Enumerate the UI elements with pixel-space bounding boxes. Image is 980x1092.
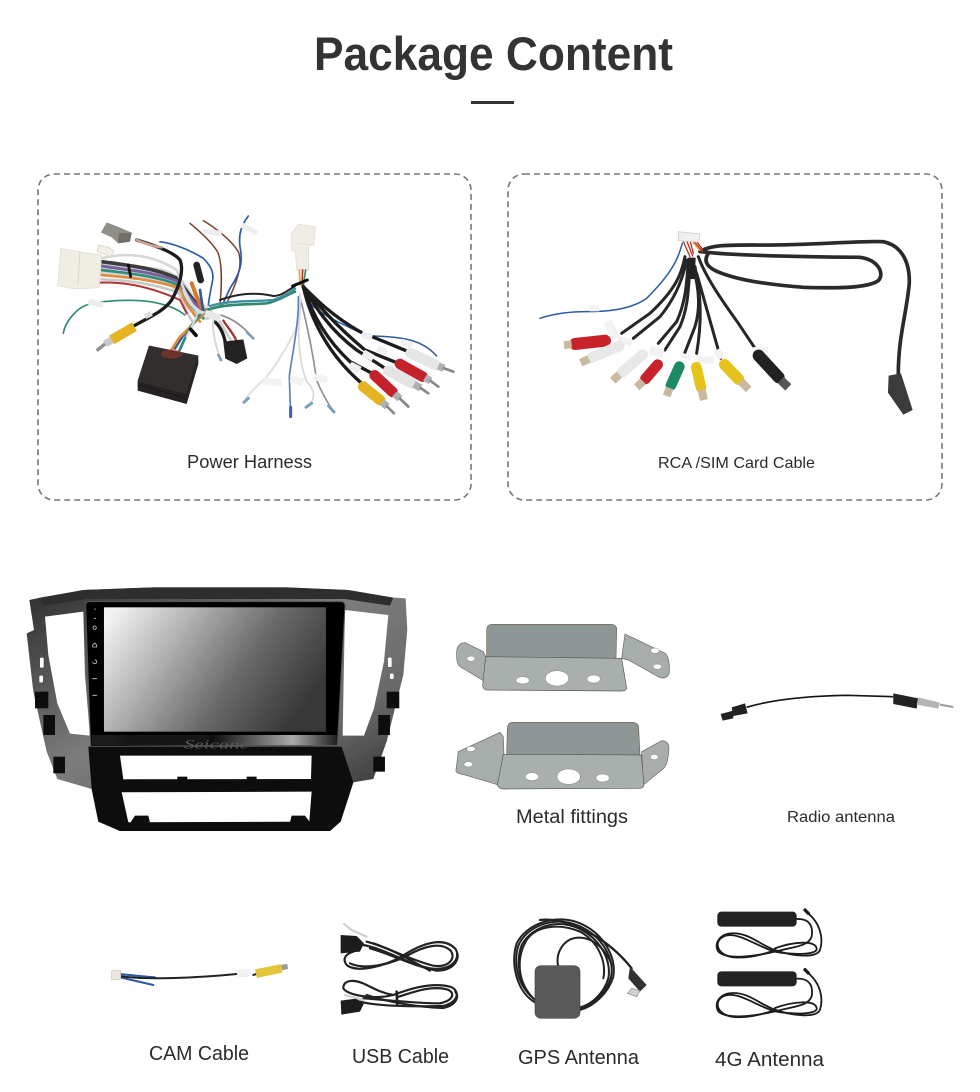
bezel icons (92, 608, 97, 695)
CAM cable (112, 966, 288, 985)
yellow RCA plug (97, 327, 134, 351)
4G antenna pair (717, 910, 821, 1017)
antenna two (717, 970, 821, 1017)
GPS antenna (514, 919, 647, 1018)
panel: power harness (38, 174, 471, 500)
label: USB cable: USB Cable (352, 1046, 449, 1068)
grey connector (101, 222, 132, 243)
frame clips (35, 692, 399, 823)
antenna one (717, 910, 821, 958)
label: power harness: Power Harness (187, 452, 312, 472)
control box (138, 346, 198, 404)
top bracket (457, 624, 669, 691)
frame windows (39, 610, 394, 822)
USB cable (341, 924, 458, 1015)
fan of wires (88, 225, 437, 417)
white right connector (292, 224, 315, 270)
power harness photo (58, 216, 453, 417)
RCA plugs (564, 341, 788, 400)
brand text: Seicane (184, 738, 250, 752)
RCA cable photo (540, 232, 913, 415)
label: metal fittings: Metal fittings (516, 807, 628, 828)
bezel (86, 602, 345, 746)
RCA plugs (244, 353, 453, 417)
radio antenna (721, 693, 953, 721)
label: CAM cable: CAM Cable (149, 1043, 249, 1065)
metal fittings (456, 624, 669, 789)
label: GPS antenna: GPS Antenna (518, 1046, 640, 1069)
head unit with dash frame (27, 587, 407, 831)
white connector (58, 245, 114, 289)
screen (104, 607, 326, 732)
title: Package Content (314, 27, 673, 80)
label: radio antenna: Radio antenna (787, 809, 895, 826)
panel: RCA / SIM card cable (508, 174, 942, 500)
label: RCA / SIM card cable: RCA /SIM Card Cable (658, 455, 815, 472)
SIM connector (678, 232, 913, 415)
black plug (223, 339, 247, 364)
title underline (471, 101, 514, 104)
bottom bracket (456, 722, 669, 789)
dash frame (27, 587, 407, 831)
labels on wires (589, 308, 768, 360)
label: 4G antenna: 4G Antenna (715, 1048, 825, 1071)
